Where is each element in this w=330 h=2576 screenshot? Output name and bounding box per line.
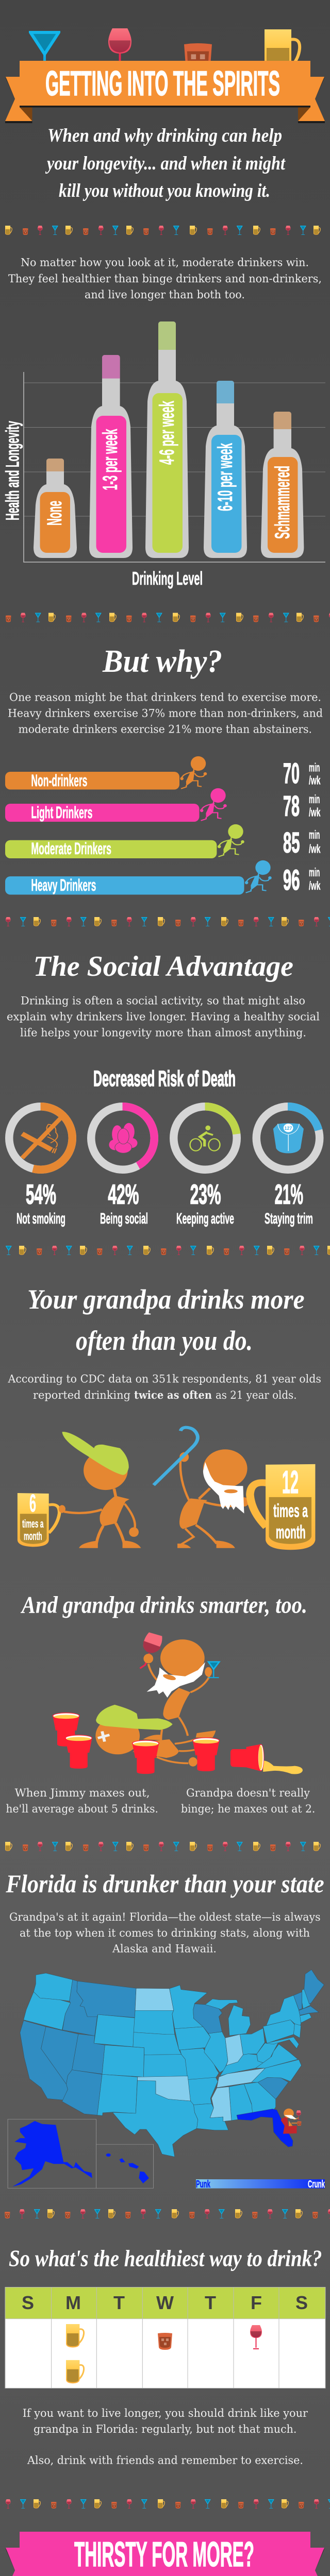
icon: bathroom scale — [273, 1123, 304, 1154]
closing advice text: Also, drink with friends and remember to exercise. — [27, 2454, 303, 2467]
bar: non-drinkers — [5, 756, 321, 790]
figure: grandpa — [154, 1428, 249, 1548]
intro text — [8, 257, 322, 301]
icon: large mug — [250, 1464, 315, 1550]
bar: non-drinkers: 70 — [283, 757, 300, 789]
grandpa text: According to CDC data on 351k respondents, 81 year olds — [8, 1372, 321, 1385]
illustration: jimmy with small beer, 6 times a month: 6 — [29, 1490, 36, 1517]
tipped cup with spilled beer — [230, 1744, 303, 1774]
figure: grandpa with wine and martini — [140, 1632, 219, 1740]
weekday letters: T — [205, 2292, 216, 2313]
subtitle — [45, 125, 286, 201]
bottle: 1-3 per week: 1-3 per week — [99, 429, 122, 490]
illustration: jimmy with small beer, 6 times a month: month — [24, 1530, 42, 1543]
divider: drink icons — [0, 917, 330, 926]
social text: life helps your longevity more than almost anything. — [20, 1026, 306, 1039]
bar: heavy drinkers: 96 — [283, 863, 300, 896]
bottle: 4-6 per week: 4-6 per week — [156, 401, 178, 465]
exercise text: One reason might be that drinkers tend to exercise more. — [9, 691, 321, 704]
donut: being social: 42% — [108, 1179, 139, 1210]
bar: moderate drinkers — [5, 824, 321, 858]
exercise text — [8, 691, 323, 736]
donut: not smoking: 54% — [26, 1179, 56, 1210]
bottle: schmammered — [261, 412, 304, 558]
bar: moderate drinkers: 85 — [283, 826, 300, 858]
weekday letters: T — [113, 2292, 125, 2313]
weekday letters: W — [156, 2292, 174, 2313]
illustration: grandpa with cane and large beer, 12 times a month — [154, 1428, 315, 1550]
subtitle: your longevity... and when it might — [45, 153, 286, 174]
heading: your grandpa drinks more often — [27, 1284, 305, 1356]
icon: bicycle — [190, 1125, 220, 1151]
divider: drink icons — [0, 2499, 330, 2509]
bar: heavy drinkers: Heavy Drinkers — [31, 876, 96, 894]
map: drinking by state — [8, 1970, 325, 2190]
intro text: They feel healthier than binge drinkers and non-drinkers, — [8, 273, 322, 285]
grandpa text: as 21 year olds. — [216, 1389, 297, 1401]
icon: people — [109, 1123, 138, 1153]
caption: grandpa — [181, 1787, 315, 1815]
bar: non-drinkers: /wk — [309, 774, 321, 787]
bar: light drinkers: /wk — [309, 806, 321, 819]
bar: non-drinkers: Non-drinkers — [31, 771, 87, 790]
donut: staying trim: 21% — [275, 1179, 303, 1210]
divider: drink icons — [0, 2209, 330, 2218]
caption: grandpa: Grandpa doesn't really — [186, 1787, 310, 1799]
closing advice text — [23, 2407, 308, 2467]
social text: Drinking is often a social activity, so that might also — [21, 994, 305, 1007]
caption: grandpa: binge; he maxes out at 2. — [181, 1803, 315, 1815]
x axis label: Drinking Level — [132, 568, 203, 589]
divider: drink icons — [0, 613, 330, 622]
bottle: none: None — [43, 501, 66, 526]
bottle: schmammered: Schmammered — [271, 466, 294, 539]
map legend: Punk — [196, 2179, 210, 2190]
heading: the social advantage: The Social Advantage — [33, 951, 293, 982]
exercise text: Heavy drinkers exercise 37% more than non-drinkers, and — [8, 707, 323, 720]
bar: heavy drinkers: /wk — [309, 879, 321, 892]
divider: drink icons — [0, 1246, 330, 1255]
states: dark tone — [20, 1970, 324, 2115]
figure: jimmy — [59, 1432, 141, 1548]
state: florida — [237, 2109, 293, 2147]
divider: drink icons — [5, 226, 330, 235]
caption: jimmy: When Jimmy maxes out, — [15, 1787, 150, 1799]
social text: explain why drinkers live longer. Having a healthy social — [7, 1011, 320, 1023]
closing advice text: grandpa in Florida: regularly, but not that much. — [34, 2423, 297, 2435]
bar: moderate drinkers: min — [309, 828, 320, 841]
exercise text: moderate drinkers exercise 21% more than abstainers. — [19, 723, 312, 736]
grandpa text: reported drinking — [33, 1389, 130, 1401]
heading: but why: But why? — [102, 644, 222, 679]
weekday letters: F — [251, 2292, 262, 2313]
donut: not smoking — [9, 1107, 72, 1227]
icon: no smoking — [22, 1117, 61, 1158]
florida text — [9, 1911, 321, 1955]
donut: being social: Being social — [100, 1210, 148, 1227]
donut: keeping active — [174, 1107, 237, 1227]
bottle: 6-10 per week — [204, 381, 247, 558]
divider: drink icons — [5, 1842, 330, 1851]
bar: moderate drinkers: /wk — [309, 842, 321, 855]
caption: jimmy — [6, 1787, 158, 1815]
map legend — [196, 2179, 325, 2190]
caption: jimmy: he'll average about 5 drinks. — [6, 1803, 158, 1815]
inset: hawaii — [96, 2144, 154, 2188]
subtitle: When and why drinking can help — [47, 125, 282, 146]
bar: moderate drinkers: Moderate Drinkers — [31, 839, 111, 858]
donut: keeping active: Keeping active — [176, 1210, 234, 1227]
donut: being social — [91, 1107, 154, 1227]
weekday letters — [22, 2292, 308, 2313]
donut: keeping active: 23% — [190, 1179, 221, 1210]
illustration: grandpa drinking, jimmy passed out with red cups — [53, 1632, 303, 1774]
bar: light drinkers: 78 — [283, 789, 300, 822]
bottle: none — [34, 459, 77, 558]
weekday letters: M — [65, 2292, 81, 2313]
red cups — [53, 1713, 220, 1774]
florida text: Grandpa's at it again! Florida—the oldest state—is always — [9, 1911, 321, 1923]
weekday letters: S — [295, 2292, 308, 2313]
bottle: 4-6 per week — [145, 321, 189, 558]
bar: light drinkers: min — [309, 792, 320, 806]
bottle: 1-3 per week — [89, 355, 133, 558]
florida text: at the top when it comes to drinking stats, along with — [20, 1927, 310, 1939]
title banner — [5, 61, 325, 123]
subtitle: kill you without you knowing it. — [59, 180, 270, 201]
states: light tone — [135, 1988, 265, 2121]
donut: not smoking: Not smoking — [16, 1210, 65, 1227]
florida text: Alaska and Hawaii. — [112, 1943, 217, 1955]
weekday letters: S — [22, 2292, 34, 2313]
donut: staying trim — [256, 1107, 320, 1227]
grandpa text — [8, 1372, 321, 1401]
header drinks: martini, wine, rocks, beer — [30, 28, 300, 76]
bar: heavy drinkers — [5, 860, 321, 896]
grandpa text: twice as often — [134, 1388, 212, 1401]
inset: alaska — [8, 2119, 96, 2188]
bar: non-drinkers: min — [309, 761, 320, 774]
social text — [7, 994, 320, 1039]
illustration: jimmy with small beer, 6 times a month: times a — [22, 1517, 44, 1530]
bar: light drinkers — [5, 788, 321, 822]
heading: your grandpa drinks more often: Your grandpa drinks more — [27, 1284, 305, 1315]
exercise bars — [5, 756, 321, 896]
states: mid tone — [24, 1973, 311, 2157]
intro text: and live longer than both too. — [85, 289, 245, 301]
illustration: jimmy with small beer, 6 times a month — [18, 1432, 141, 1548]
illustration: grandpa with cane and large beer, 12 times a month: 12 — [282, 1465, 299, 1500]
intro text: No matter how you look at it, moderate drinkers win. — [21, 257, 309, 269]
weekly calendar table — [5, 2287, 325, 2388]
bar: light drinkers: Light Drinkers — [31, 803, 92, 822]
closing advice text: If you want to live longer, you should drink like your — [23, 2407, 308, 2419]
heading: your grandpa drinks more often: often than you do. — [76, 1325, 253, 1356]
figure: jimmy passed out — [95, 1705, 198, 1767]
icon: bathroom scale: 127 — [284, 1126, 292, 1131]
bottle chart: health and longevity by drinking level — [2, 321, 325, 589]
figure: grandpa on chair in florida — [281, 2109, 301, 2134]
icon: small mug — [18, 1493, 59, 1547]
bar: heavy drinkers: min — [309, 866, 320, 879]
bottle: 6-10 per week: 6-10 per week — [214, 443, 237, 511]
y axis label: Health and Longevity — [2, 421, 23, 520]
thirsty for more banner — [5, 2532, 325, 2576]
icons: monday beers, wednesday rocks, friday wine — [66, 2324, 262, 2383]
